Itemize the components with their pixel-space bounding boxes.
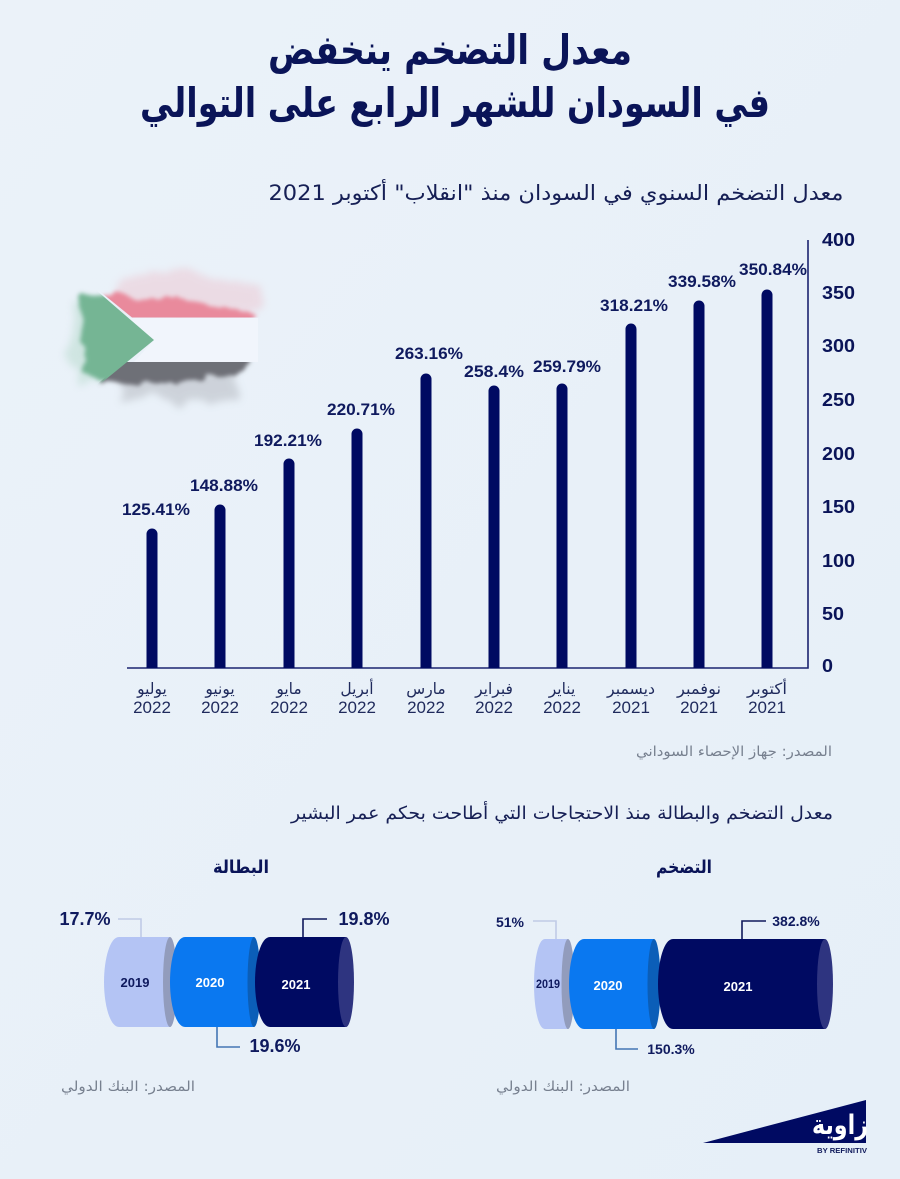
x axis labels: 2022: [338, 698, 376, 717]
cylinder 2020: 2020: [594, 978, 622, 993]
cylinder 2019: [104, 937, 177, 1027]
value labels: 258.4%: [464, 363, 524, 381]
cylinder 2021: [658, 939, 833, 1029]
y axis labels: 350: [822, 283, 855, 303]
x axis labels: 2021: [748, 698, 786, 717]
flag white band: [122, 318, 258, 362]
x axis labels: 2022: [270, 698, 308, 717]
value labels: 148.88%: [190, 477, 258, 495]
panel: unemployment: [59, 857, 390, 1095]
x axis labels: يناير: [548, 680, 575, 698]
y axis labels: 50: [822, 604, 844, 624]
cylinder 2021: [255, 937, 354, 1027]
flag green triangle: [76, 290, 154, 383]
value labels: 382.8%: [772, 913, 820, 929]
bars: [146, 290, 772, 668]
title: معدل التضخم ينخفض: [268, 26, 632, 74]
source: chart: المصدر: جهاز الإحصاء السوداني: [636, 744, 832, 760]
x axis labels: 2022: [201, 698, 239, 717]
value labels: 19.6%: [249, 1036, 301, 1056]
value labels: 19.8%: [338, 909, 390, 929]
x axis labels: نوفمبر: [676, 680, 721, 698]
y axis labels: 100: [822, 551, 855, 571]
y axis labels: 200: [822, 444, 855, 464]
y axis labels: 0: [822, 656, 833, 676]
y axis labels: 300: [822, 336, 855, 356]
x axis labels: 2022: [543, 698, 581, 717]
value labels: 192.21%: [254, 432, 322, 450]
y axis labels: [822, 230, 855, 676]
logo: Zawya by Refinitiv: [703, 1100, 868, 1155]
logo: Zawya by Refinitiv: BY REFINITIV: [817, 1148, 867, 1155]
value labels: 220.71%: [327, 401, 395, 419]
leader lines: [533, 921, 766, 1049]
cylinder 2021: 2021: [724, 979, 752, 994]
bar chart: annual inflation: [122, 230, 855, 717]
title: في السودان للشهر الرابع على التوالي: [140, 79, 770, 127]
x axis labels: مايو: [275, 680, 302, 698]
x axis labels: ديسمبر: [606, 680, 655, 698]
value labels: 125.41%: [122, 501, 190, 519]
flag red band: [102, 289, 258, 318]
x axis labels: 2022: [475, 698, 513, 717]
y axis labels: 400: [822, 230, 855, 250]
y axis and x axis: [127, 240, 808, 668]
x axis labels: 2021: [680, 698, 718, 717]
value labels: 350.84%: [739, 261, 807, 279]
y axis labels: 250: [822, 390, 855, 410]
cylinder 2020: [569, 939, 660, 1029]
section heading: معدل التضخم والبطالة منذ الاحتجاجات التي أطاحت بحكم عمر البشير: [290, 801, 833, 824]
x axis labels: 2021: [612, 698, 650, 717]
value labels: [122, 261, 807, 519]
value labels: 263.16%: [395, 345, 463, 363]
flag black band: [98, 362, 252, 388]
value labels: 17.7%: [59, 909, 111, 929]
value labels: 339.58%: [668, 273, 736, 291]
x axis labels: مارس: [406, 680, 446, 698]
panel: inflation: [496, 857, 833, 1095]
x axis labels: 2022: [133, 698, 171, 717]
value labels: 318.21%: [600, 297, 668, 315]
title: [140, 26, 770, 127]
x axis labels: [133, 678, 787, 717]
x axis labels: فبراير: [474, 680, 513, 698]
x axis labels: يونيو: [204, 680, 235, 698]
value labels: [59, 909, 390, 1056]
heading: inflation: التضخم: [656, 857, 712, 878]
y axis labels: 150: [822, 497, 855, 517]
flag haze: [72, 272, 262, 400]
cylinder 2019: 2019: [536, 977, 560, 991]
value labels: 150.3%: [647, 1041, 695, 1057]
x axis labels: 2022: [407, 698, 445, 717]
cylinder 2020: [170, 937, 260, 1027]
value labels: [496, 913, 820, 1057]
source: unemployment: المصدر: البنك الدولي: [61, 1079, 195, 1095]
value labels: 259.79%: [533, 358, 601, 376]
icon: Sudan flag: [72, 272, 262, 400]
x axis labels: يوليو: [136, 680, 167, 698]
x axis labels: أبريل: [340, 678, 374, 698]
x axis labels: أكتوبر: [746, 678, 787, 698]
cylinder 2019: [534, 939, 574, 1029]
value labels: 51%: [496, 914, 525, 930]
source: inflation: المصدر: البنك الدولي: [496, 1079, 630, 1095]
cylinder 2021: 2021: [282, 977, 310, 992]
leader lines: [118, 919, 327, 1047]
logo: Zawya by Refinitiv: زاوية: [812, 1110, 868, 1141]
heading: unemployment: البطالة: [213, 857, 269, 878]
cylinder 2019: 2019: [121, 975, 149, 990]
cylinder 2020: 2020: [196, 975, 224, 990]
chart subtitle: معدل التضخم السنوي في السودان منذ "انقلاب" أكتوبر 2021: [268, 179, 843, 206]
